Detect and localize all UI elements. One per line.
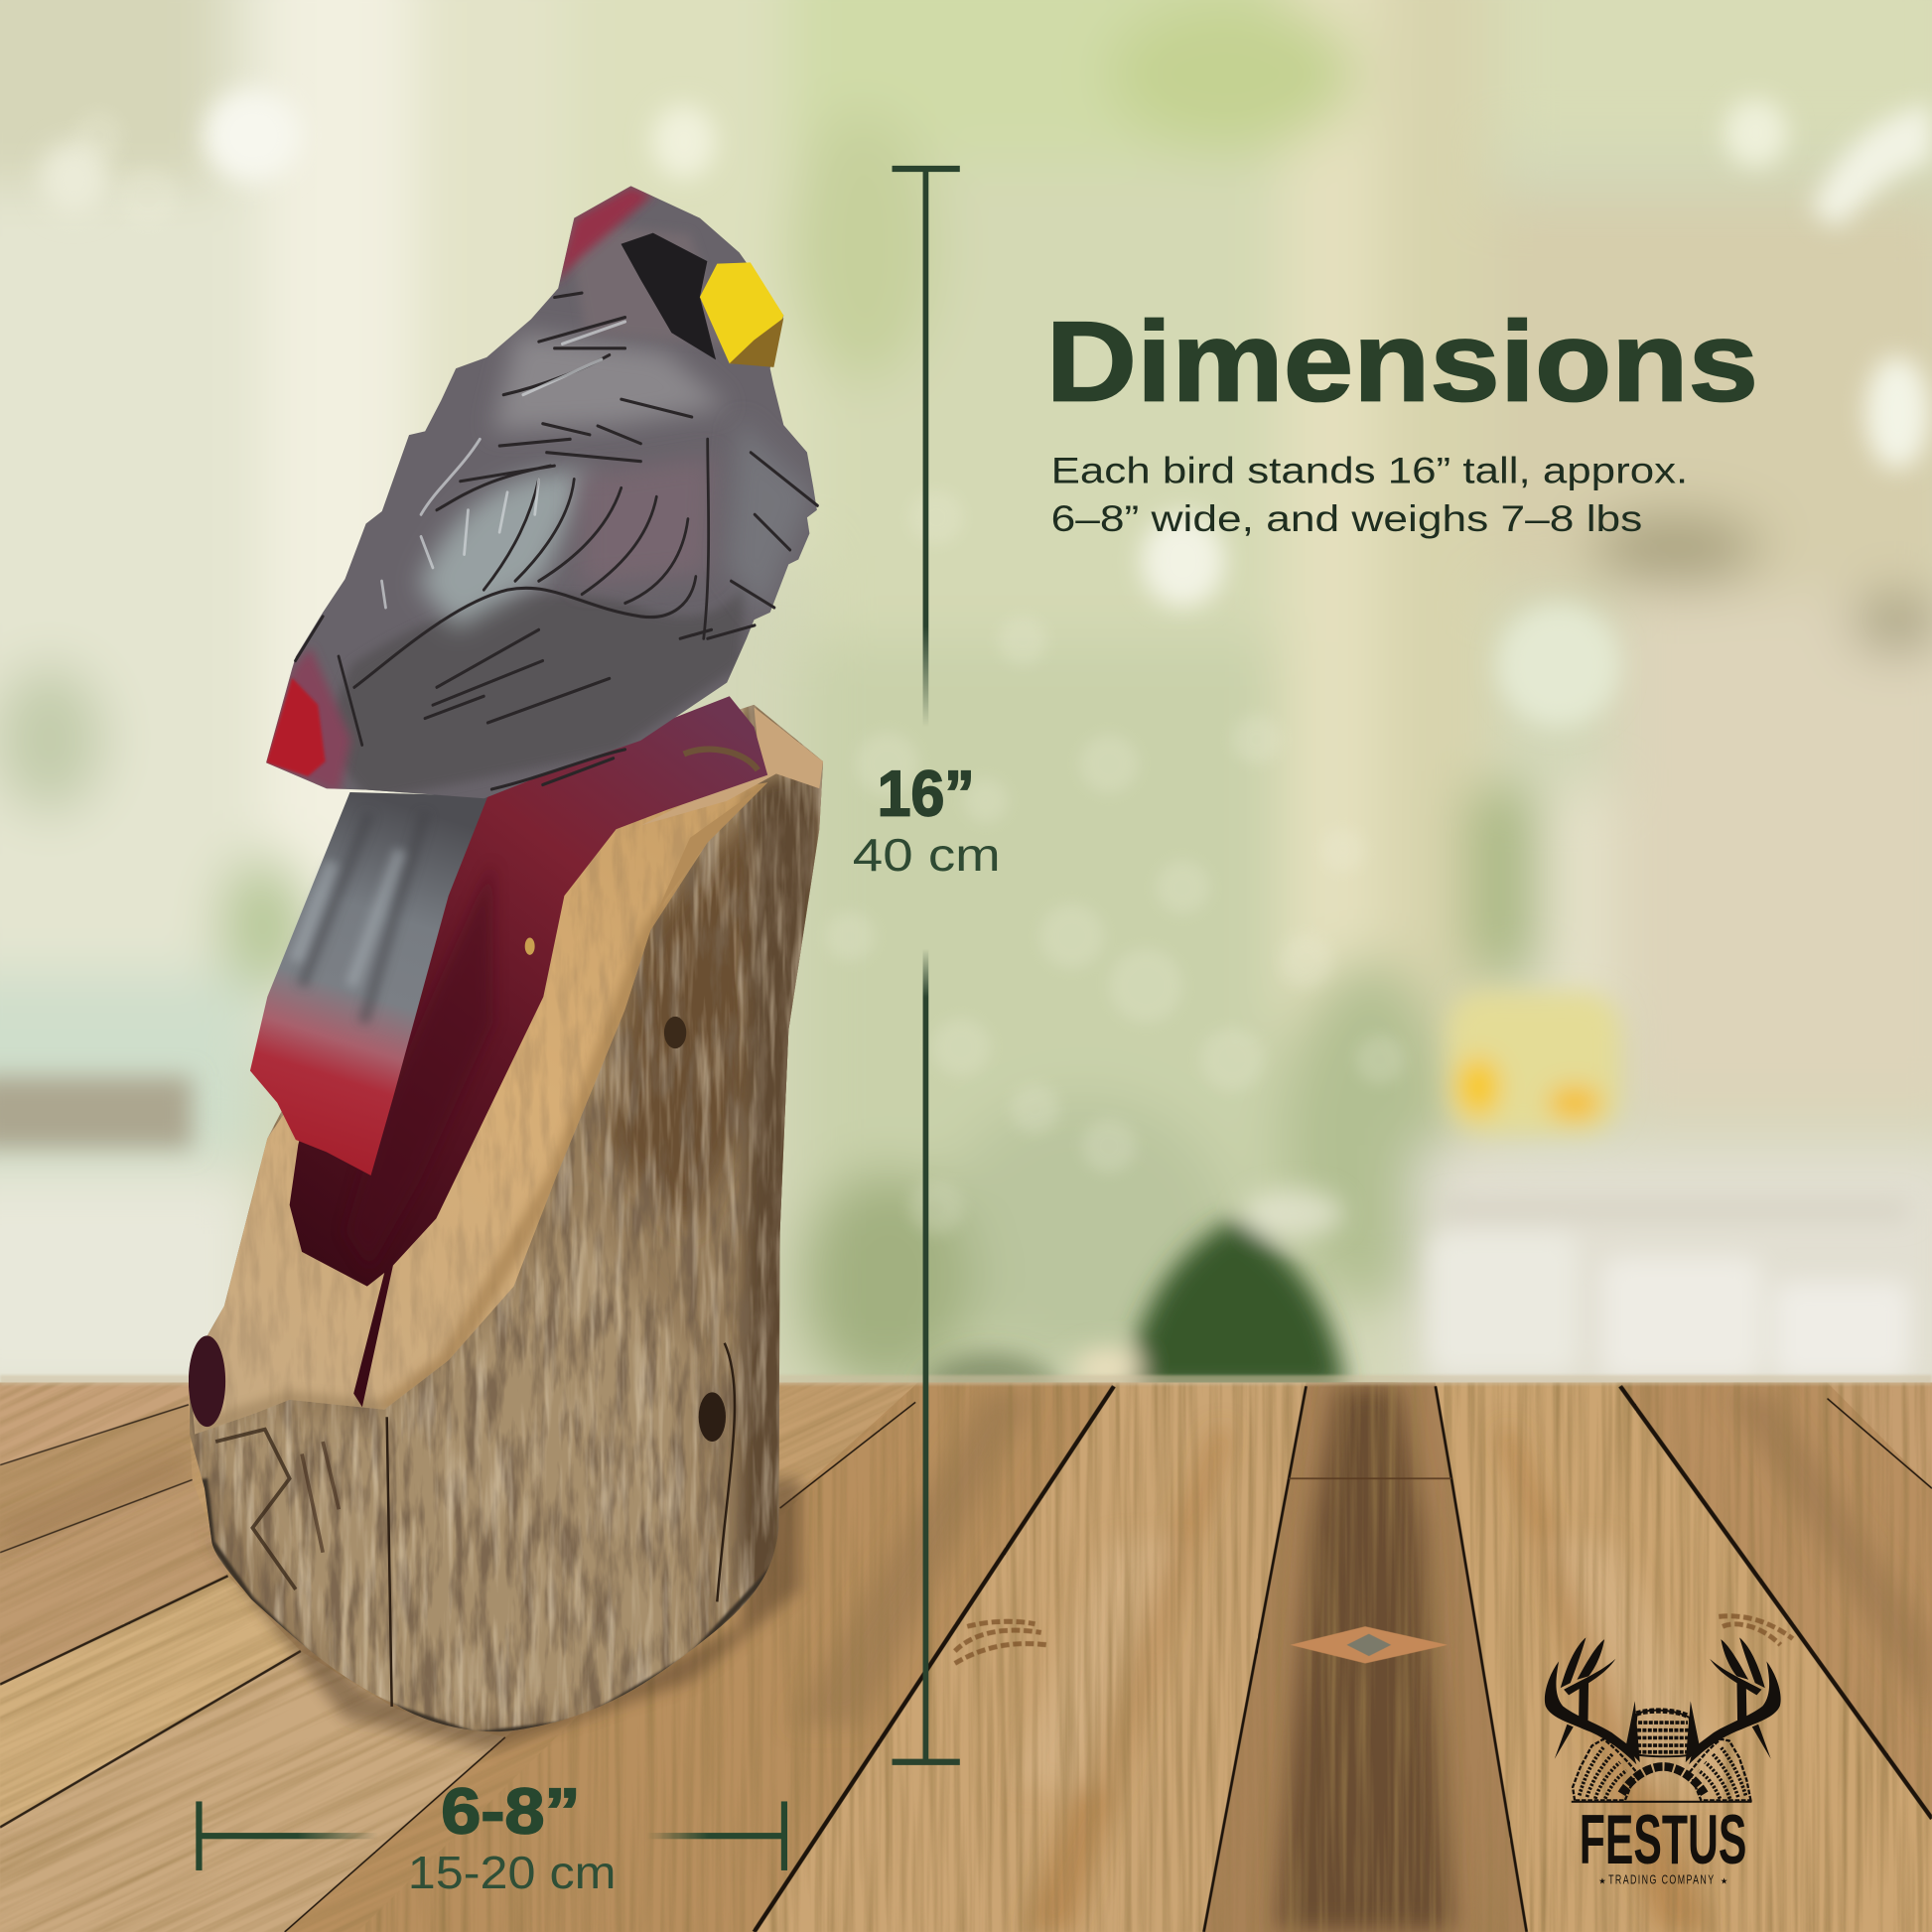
bird body <box>266 186 817 801</box>
carved feather lines <box>296 280 817 789</box>
description <box>1051 449 1688 539</box>
logo tagline: TRADING COMPANY <box>1608 1873 1716 1887</box>
height label <box>853 759 1001 881</box>
carved cardinal on log <box>173 186 838 1749</box>
logo tagline: ★ <box>1598 1875 1606 1885</box>
width label <box>408 1776 617 1898</box>
tail feathers <box>250 792 487 1175</box>
log top pale wood <box>640 707 823 826</box>
red wing tip <box>266 678 326 776</box>
height label: 16” <box>878 759 975 830</box>
heartwood stain <box>290 696 767 1407</box>
beak <box>700 262 783 363</box>
width label: 15-20 cm <box>408 1847 617 1898</box>
log stump <box>173 690 838 1749</box>
width label: 6-8” <box>441 1776 581 1848</box>
width measure <box>196 1801 787 1870</box>
icon: antlers right <box>1686 1637 1781 1764</box>
logo wordmark: FESTUS <box>1580 1800 1746 1878</box>
logo tagline: ★ <box>1721 1875 1728 1885</box>
description: Each bird stands 16” tall, approx. <box>1051 449 1688 490</box>
description: 6–8” wide, and weighs 7–8 lbs <box>1051 497 1642 539</box>
logo: Festus Trading Company <box>1545 1637 1781 1887</box>
eye mask <box>621 233 716 359</box>
icon: turkey fan <box>1573 1711 1750 1800</box>
wing tip blush <box>266 647 351 794</box>
red crown <box>554 186 653 283</box>
icon: antlers left <box>1545 1637 1640 1764</box>
plank colour streaks <box>0 1386 1932 1932</box>
blurred garden background <box>0 0 1932 1417</box>
vertical height measure <box>893 169 960 1762</box>
height label: 40 cm <box>853 829 1001 881</box>
stump shadow <box>198 1478 801 1749</box>
floor knots <box>955 1616 1793 1663</box>
cut face pale wood <box>185 776 776 1442</box>
title: Dimensions <box>1046 299 1758 425</box>
wooden floor planks <box>0 1382 1932 1932</box>
